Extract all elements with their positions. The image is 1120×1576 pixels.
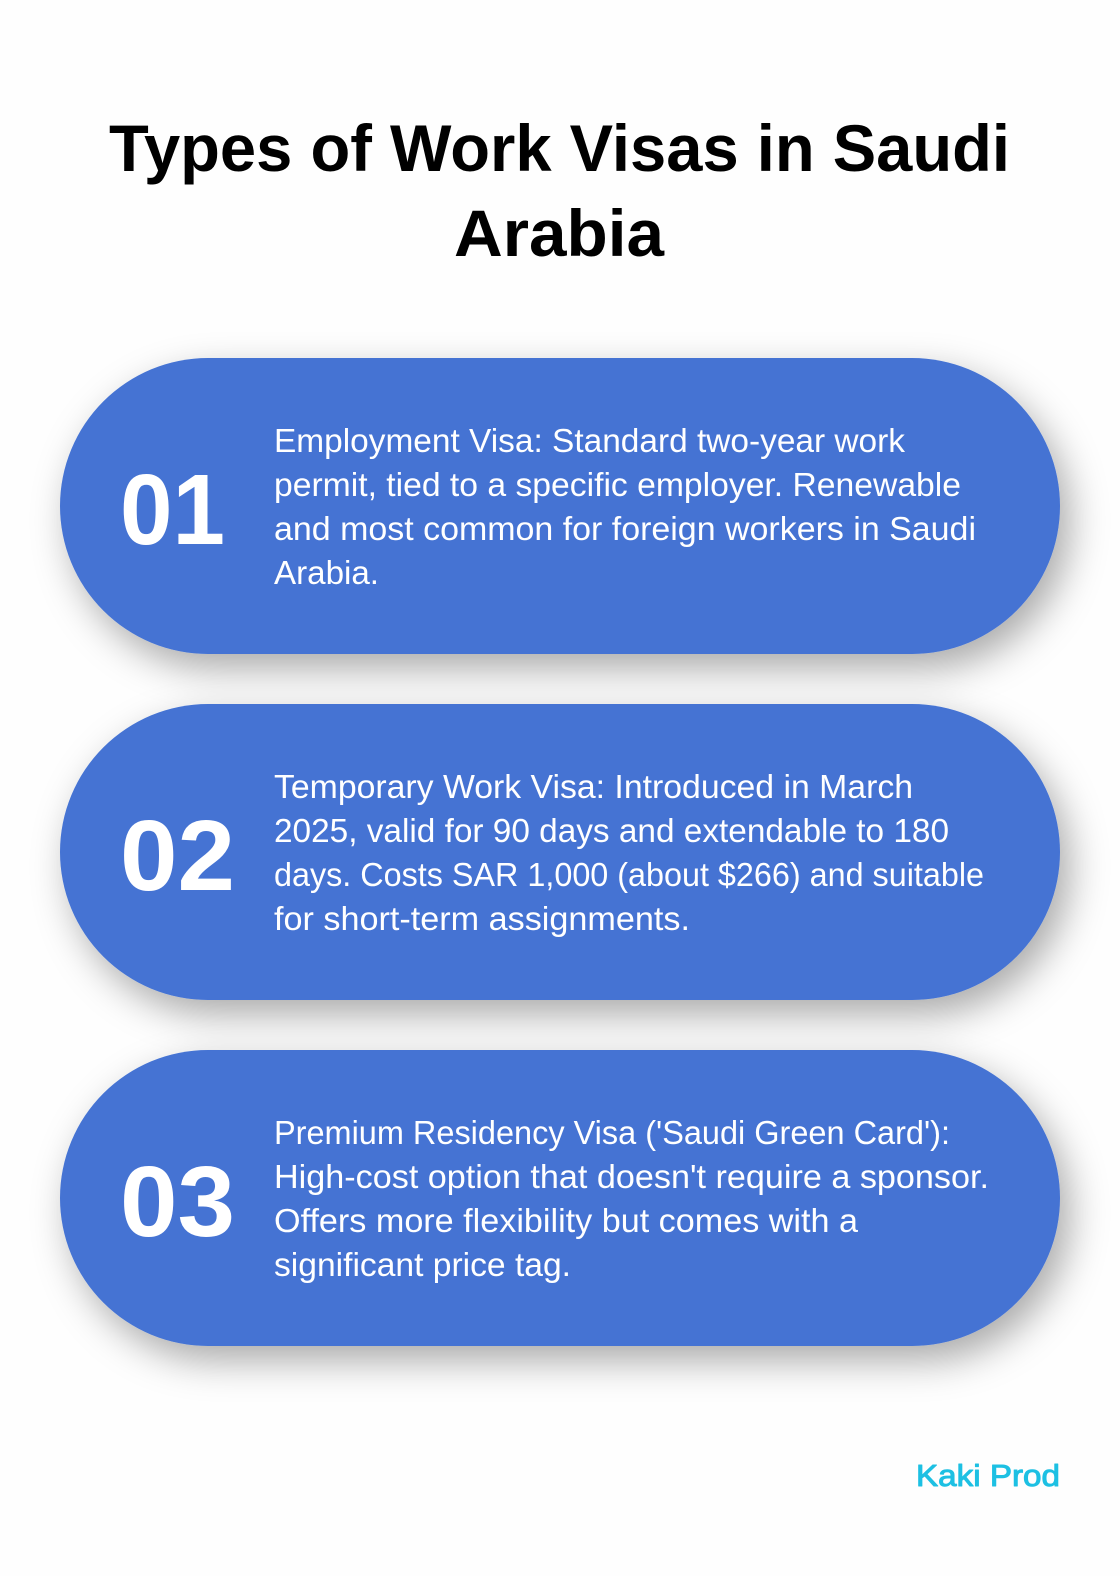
temporary work visa description <box>274 768 984 937</box>
panel: employment visa <box>60 358 1060 654</box>
premium residency visa description: significant price tag. <box>274 1246 571 1283</box>
premium residency visa description: High-cost option that doesn't require a sponsor. <box>274 1158 989 1195</box>
premium residency visa description <box>274 1114 989 1283</box>
number 02: 02 <box>120 800 235 912</box>
employment visa description: Arabia. <box>274 554 379 591</box>
title: Arabia <box>454 196 665 270</box>
temporary work visa description: for short-term assignments. <box>274 900 690 937</box>
temporary work visa description: 2025, valid for 90 days and extendable to 180 <box>274 812 949 849</box>
employment visa description: Employment Visa: Standard two-year work <box>274 422 905 459</box>
logo: Kaki Prod: Kaki Prod <box>916 1458 1060 1493</box>
premium residency visa description: Offers more flexibility but comes with a <box>274 1202 859 1239</box>
panel: premium residency visa <box>60 1050 1060 1346</box>
employment visa description: permit, tied to a specific employer. Renewable <box>274 466 961 503</box>
number 03: 03 <box>120 1146 235 1258</box>
employment visa description <box>274 422 976 591</box>
premium residency visa description: Premium Residency Visa ('Saudi Green Card'): <box>274 1114 950 1151</box>
title <box>109 111 1010 270</box>
panel: temporary work visa <box>60 704 1060 1000</box>
title: Types of Work Visas in Saudi <box>109 111 1010 185</box>
number 01: 01 <box>120 454 225 566</box>
temporary work visa description: days. Costs SAR 1,000 (about $266) and suitable <box>274 856 984 893</box>
employment visa description: and most common for foreign workers in Saudi <box>274 510 976 547</box>
temporary work visa description: Temporary Work Visa: Introduced in March <box>274 768 913 805</box>
